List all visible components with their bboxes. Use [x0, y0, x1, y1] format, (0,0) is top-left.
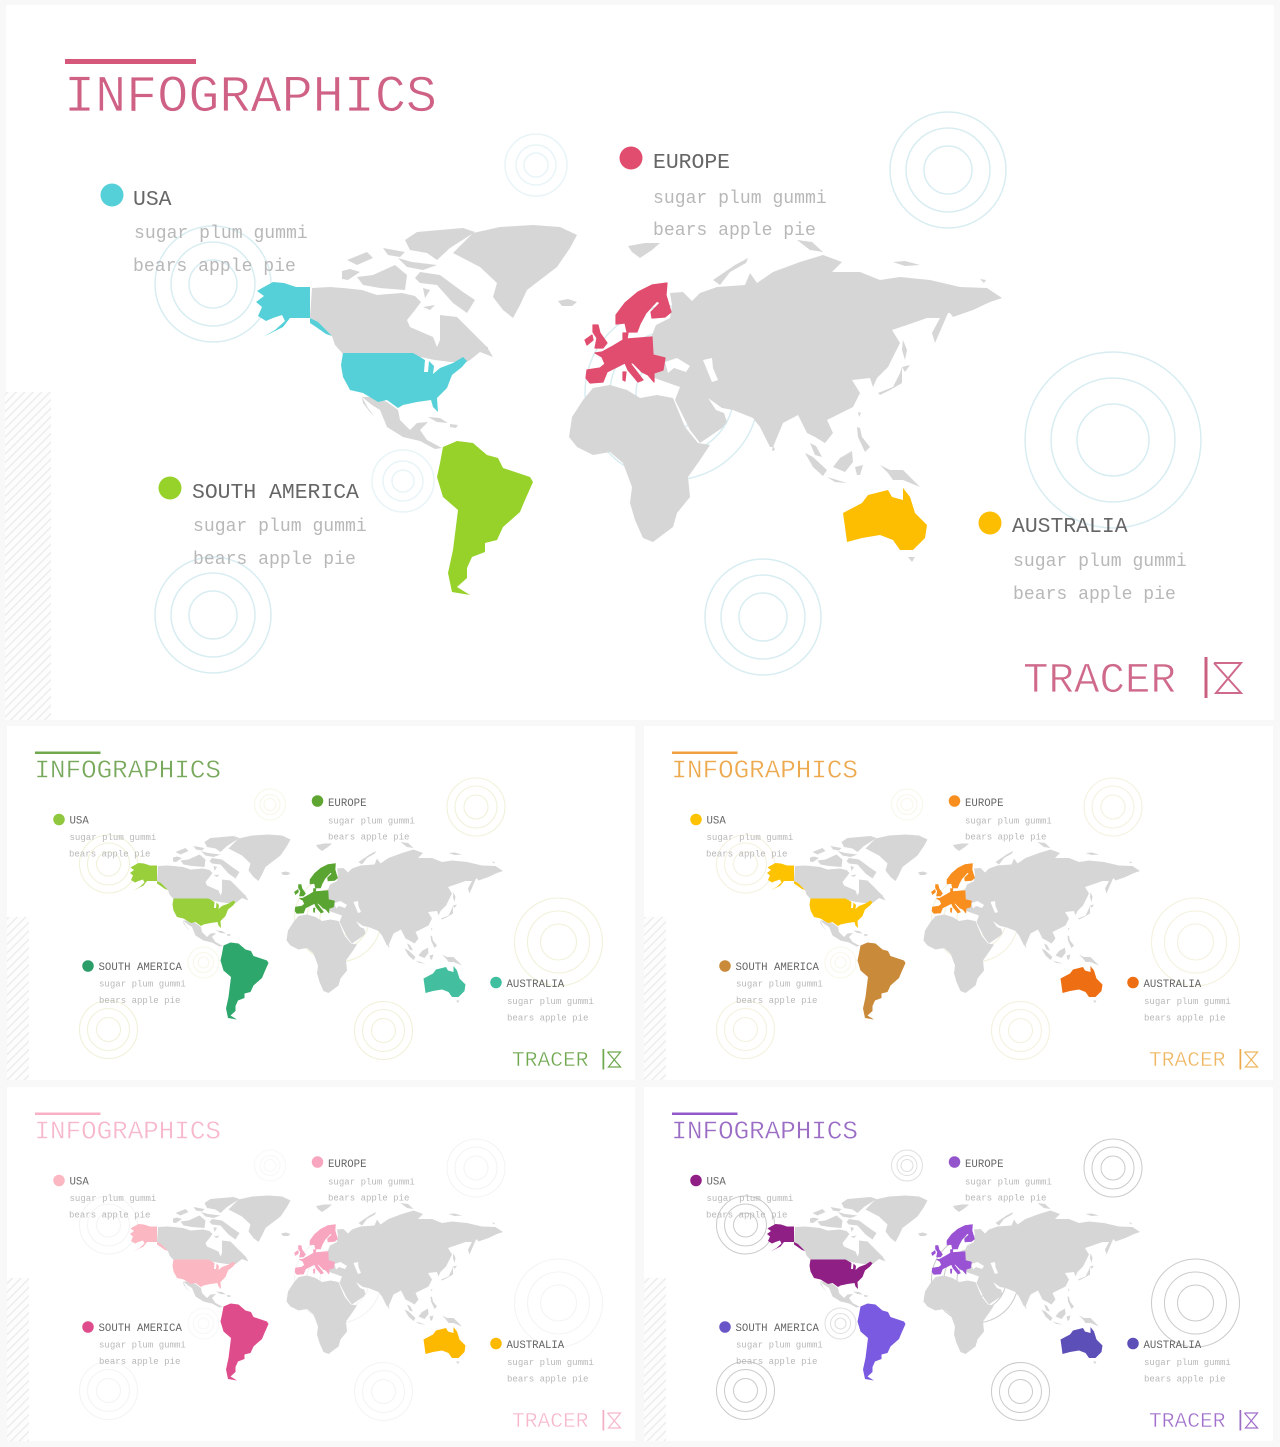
panel: orange variant [644, 726, 1273, 1080]
legend: South America: sugar plum gummi [736, 1340, 823, 1350]
legend: Europe [620, 146, 827, 241]
legend: USA: bears apple pie [706, 848, 787, 860]
legend: Australia: AUSTRALIA [1144, 979, 1202, 991]
legend: Europe: EUROPE [965, 1159, 1003, 1171]
legend: Europe: sugar plum gummi [965, 816, 1052, 826]
legend: Australia [490, 977, 594, 1024]
world map [767, 834, 1140, 1020]
world map [130, 1196, 503, 1380]
logo: Tracer: TRACER [1023, 657, 1176, 705]
logo: Tracer: TRACER [1149, 1049, 1226, 1073]
legend: USA: USA [70, 1176, 89, 1188]
legend: South America: sugar plum gummi [193, 517, 367, 537]
legend: South America [82, 960, 186, 1006]
logo: Tracer: TRACER [1149, 1410, 1226, 1434]
legend: South America: bears apple pie [99, 1356, 180, 1367]
legend: USA: sugar plum gummi [70, 832, 156, 843]
legend: Australia: sugar plum gummi [1144, 1357, 1231, 1368]
legend: South America: bears apple pie [99, 995, 180, 1006]
legend: South America: SOUTH AMERICA [736, 962, 819, 974]
legend: Australia: AUSTRALIA [1144, 1340, 1202, 1352]
legend: USA [53, 814, 156, 860]
legend: Europe: sugar plum gummi [965, 1176, 1052, 1188]
legend: USA: USA [133, 188, 172, 212]
legend: Europe [312, 1156, 415, 1204]
legend: South America: bears apple pie [736, 995, 817, 1006]
legend: USA [100, 184, 308, 277]
legend: Australia [1127, 1338, 1231, 1384]
legend: Australia: sugar plum gummi [1013, 552, 1187, 572]
legend: South America [719, 960, 823, 1006]
legend: Australia: bears apple pie [1144, 1012, 1225, 1024]
legend: South America [719, 1321, 823, 1367]
legend: South America: sugar plum gummi [99, 1340, 186, 1350]
panel: pink variant [7, 1087, 635, 1441]
panel: main infographic, red theme [5, 5, 1274, 720]
legend: South America: bears apple pie [736, 1356, 817, 1367]
world map [130, 834, 503, 1020]
legend: USA: bears apple pie [69, 1210, 150, 1220]
heading: title: INFOGRAPHICS [64, 68, 437, 127]
legend: Europe: sugar plum gummi [328, 816, 415, 826]
logo: Tracer: TRACER [512, 1410, 589, 1434]
legend: USA: USA [706, 816, 726, 828]
legend: Australia: bears apple pie [1013, 585, 1176, 605]
legend: Australia: AUSTRALIA [1012, 515, 1128, 539]
legend: Europe: EUROPE [965, 798, 1003, 810]
legend: Australia: AUSTRALIA [506, 1340, 565, 1352]
heading: title: INFOGRAPHICS [672, 756, 858, 786]
legend: Australia [1127, 977, 1231, 1024]
legend: Europe: EUROPE [653, 151, 730, 175]
legend: USA: USA [70, 816, 89, 828]
legend: Europe [949, 1156, 1052, 1204]
legend: South America: SOUTH AMERICA [192, 481, 359, 505]
legend: USA: bears apple pie [69, 848, 150, 860]
legend: Europe [949, 795, 1052, 842]
legend: Australia: sugar plum gummi [1144, 996, 1231, 1007]
legend: Europe: bears apple pie [328, 832, 409, 842]
legend: USA: sugar plum gummi [70, 1193, 156, 1204]
heading: title: INFOGRAPHICS [34, 1116, 221, 1146]
legend: USA: bears apple pie [133, 257, 296, 277]
world map [767, 1196, 1140, 1380]
legend: USA: sugar plum gummi [706, 832, 793, 843]
legend: Europe: bears apple pie [653, 221, 816, 241]
legend: USA: sugar plum gummi [134, 224, 308, 244]
legend: South America: bears apple pie [193, 550, 356, 570]
legend: Europe: sugar plum gummi [328, 1176, 415, 1188]
legend: South America: SOUTH AMERICA [736, 1323, 819, 1335]
legend: Australia: bears apple pie [507, 1012, 588, 1024]
legend: Australia: bears apple pie [1144, 1374, 1225, 1384]
panel: green variant [7, 726, 635, 1080]
legend: Australia: AUSTRALIA [506, 979, 565, 991]
legend: Australia: bears apple pie [507, 1374, 588, 1384]
legend: Europe: sugar plum gummi [653, 189, 827, 209]
legend: USA [690, 814, 793, 860]
legend: Australia: sugar plum gummi [507, 996, 594, 1007]
legend: Europe: EUROPE [328, 1159, 366, 1171]
legend: Europe [312, 795, 415, 842]
legend: South America: sugar plum gummi [99, 978, 186, 990]
legend: Europe: bears apple pie [965, 1192, 1046, 1204]
logo: Tracer: TRACER [512, 1049, 589, 1073]
panel: purple variant [644, 1087, 1273, 1441]
legend: Australia: sugar plum gummi [507, 1357, 594, 1368]
legend: USA: USA [706, 1176, 726, 1188]
legend: USA: sugar plum gummi [706, 1193, 793, 1204]
legend: South America [158, 476, 367, 570]
legend: South America: SOUTH AMERICA [98, 1323, 182, 1335]
legend: Europe: bears apple pie [965, 832, 1046, 842]
legend: South America: sugar plum gummi [736, 978, 823, 990]
legend: South America [82, 1321, 186, 1367]
world map [256, 225, 1002, 595]
legend: USA [53, 1175, 156, 1220]
legend: USA: bears apple pie [706, 1210, 787, 1220]
legend: Europe: bears apple pie [328, 1192, 409, 1204]
heading: title: INFOGRAPHICS [34, 756, 221, 786]
legend: USA [690, 1175, 793, 1220]
legend: Australia [978, 512, 1187, 605]
heading: title: INFOGRAPHICS [672, 1116, 858, 1146]
legend: Europe: EUROPE [328, 798, 366, 810]
legend: South America: SOUTH AMERICA [98, 962, 182, 974]
legend: Australia [490, 1338, 594, 1384]
